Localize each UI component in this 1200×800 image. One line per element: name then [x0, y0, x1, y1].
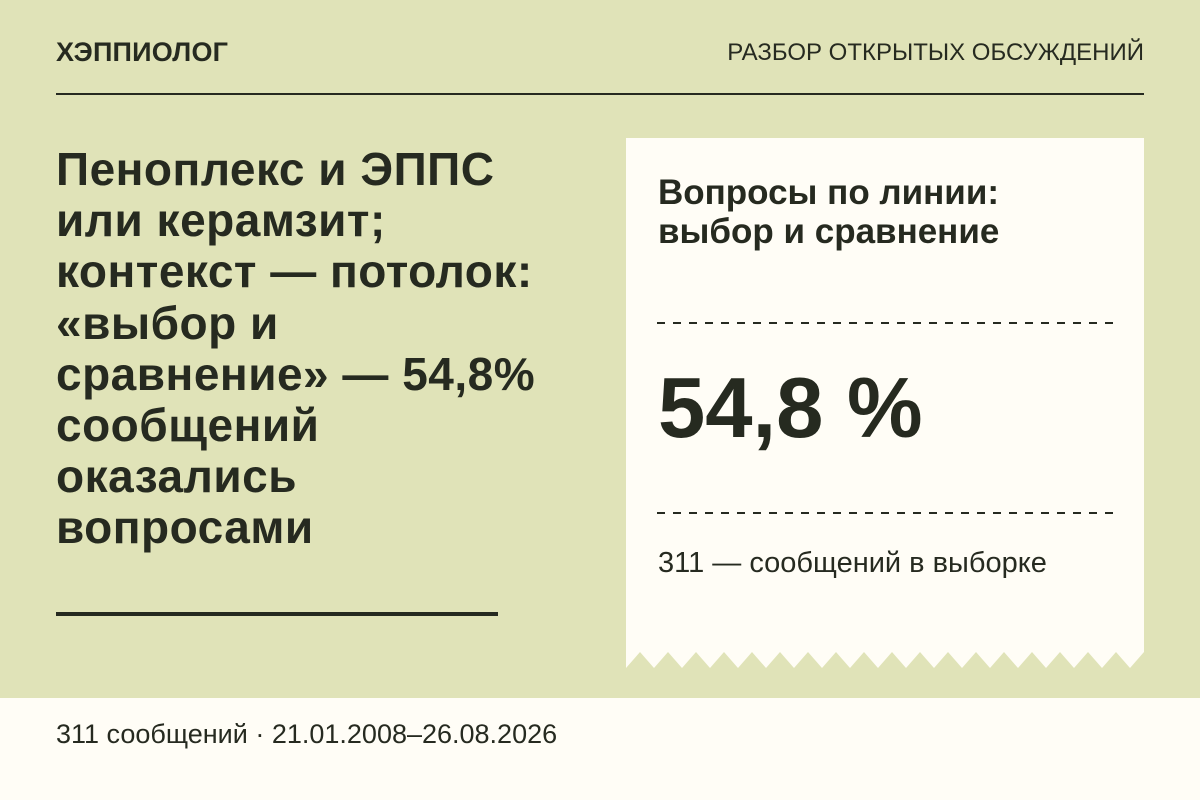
- panel: receipt card: [626, 138, 1144, 668]
- header subtitle: РАЗБОР ОТКРЫТЫХ ОБСУЖДЕНИЙ: [727, 39, 1144, 66]
- main headline: Пеноплекс и ЭППС: [56, 143, 494, 195]
- main headline: «выбор и: [56, 297, 279, 349]
- footer band: [0, 698, 1200, 800]
- headline underline: [56, 612, 498, 616]
- dashed divider bottom: [657, 512, 1113, 514]
- main headline: вопросами: [56, 501, 314, 553]
- footer text: 311 сообщений · 21.01.2008–26.08.2026: [56, 719, 557, 749]
- big percentage: 54,8 %: [658, 361, 923, 456]
- main headline: контекст — потолок:: [56, 245, 533, 297]
- dashed divider top: [657, 322, 1113, 324]
- main headline: или керамзит;: [56, 194, 386, 246]
- main headline: [56, 143, 535, 553]
- main headline: сообщений: [56, 399, 319, 451]
- main headline: сравнение» — 54,8%: [56, 348, 535, 400]
- sample size note: 311 — сообщений в выборке: [658, 547, 1047, 579]
- card heading: [658, 173, 999, 251]
- header rule: [56, 93, 1144, 95]
- receipt background with zigzag edge: [626, 138, 1144, 668]
- card heading: выбор и сравнение: [658, 212, 999, 251]
- card heading: Вопросы по линии:: [658, 173, 999, 212]
- main headline: оказались: [56, 450, 297, 502]
- brand name: ХЭППИОЛОГ: [56, 37, 228, 67]
